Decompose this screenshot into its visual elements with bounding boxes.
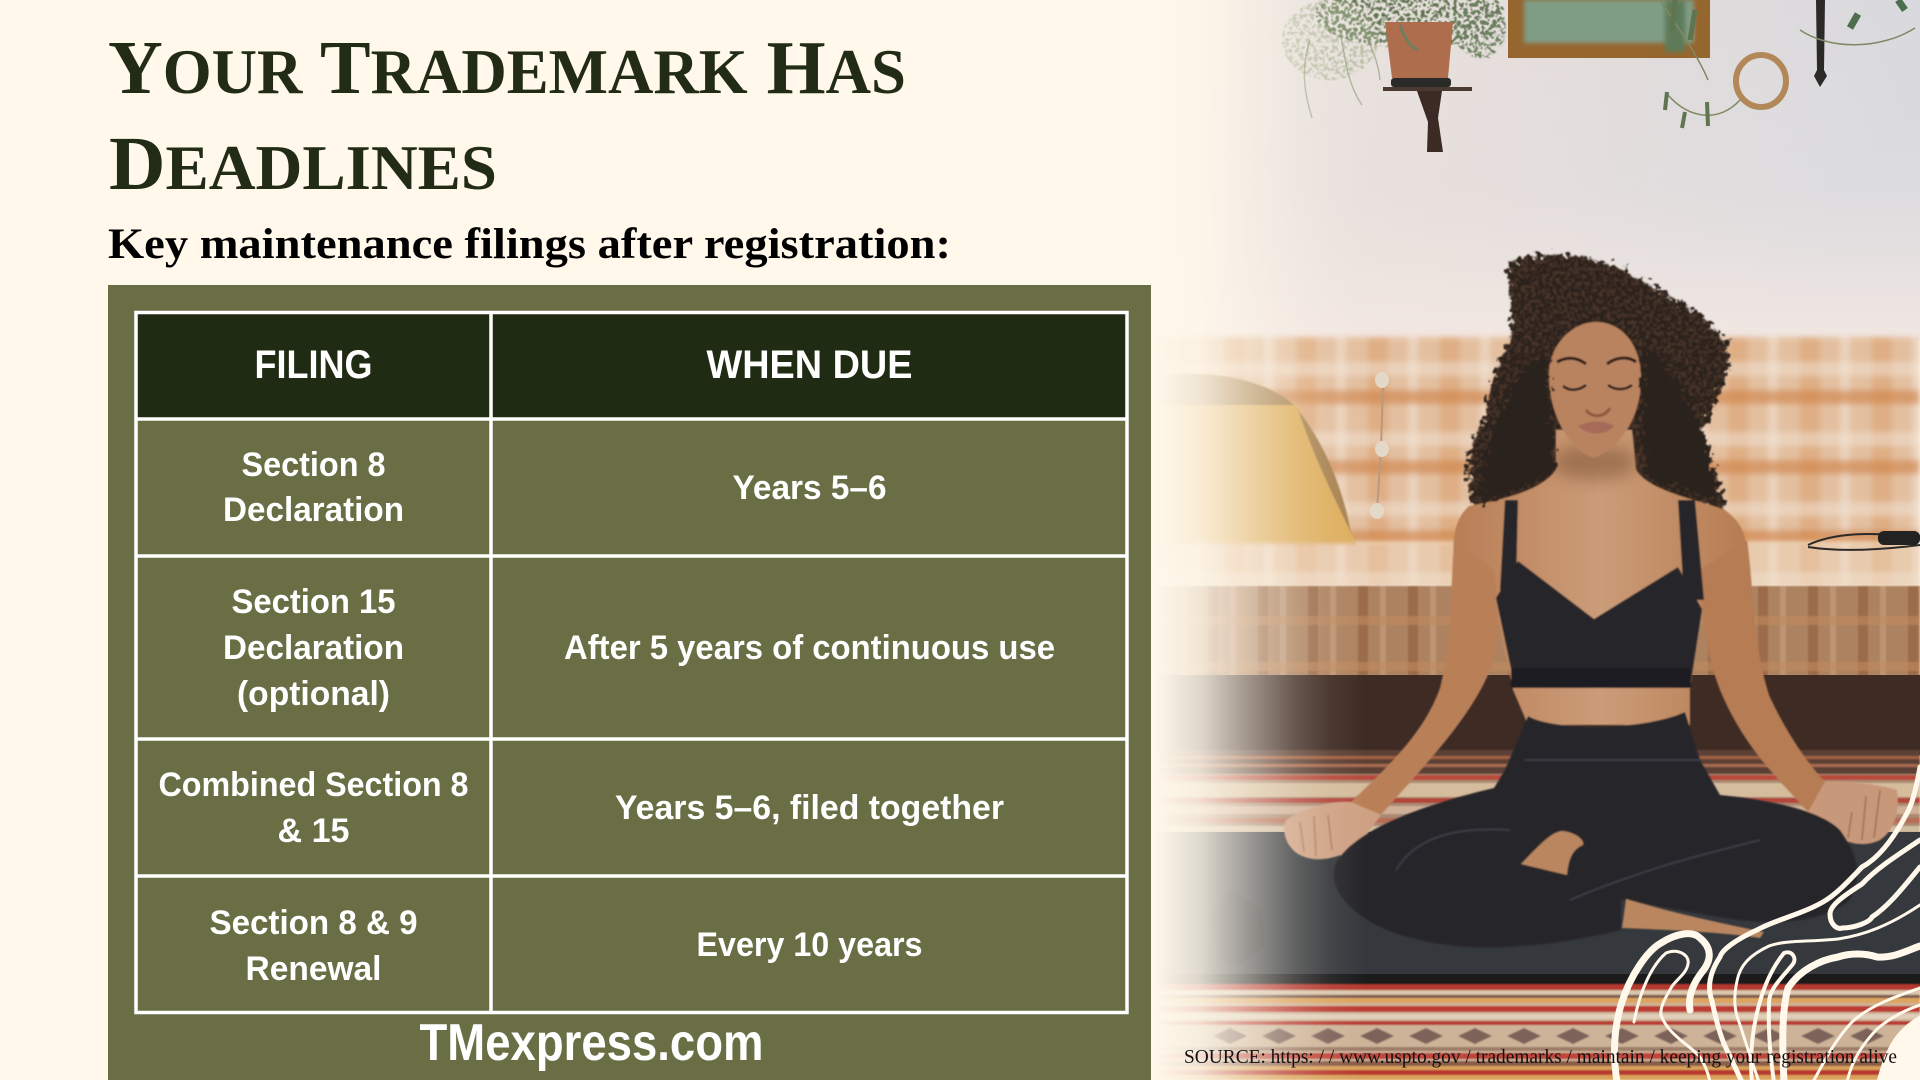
photo: wall <box>1150 0 1920 340</box>
title: Deadlines <box>109 110 497 209</box>
panel: filings table background <box>108 285 1151 1080</box>
woman: right hand <box>1808 782 1898 844</box>
photo: wooden ring <box>1736 55 1786 107</box>
website footer: TMexpress.com <box>420 1014 764 1072</box>
title: Your Trademark Has <box>108 14 906 113</box>
row: section 8: Section 8 <box>242 446 386 484</box>
photo: left fade into page colour <box>1130 0 1365 1080</box>
photo: woman meditating on a mat in a living room <box>1130 0 1920 1080</box>
woman: leggings <box>1334 712 1857 947</box>
woman: neck shadow <box>1552 444 1636 480</box>
woman: front hair locks <box>1481 345 1717 505</box>
row: section 15: After 5 years of continuous use <box>564 629 1055 667</box>
row: section 8 and 9 renewal: Every 10 years <box>696 926 922 964</box>
row: section 15: (optional) <box>237 675 390 713</box>
photo: cable on sofa <box>1808 531 1920 550</box>
header: filing: FILING <box>254 343 372 387</box>
photo: back cushion <box>1150 374 1352 545</box>
row: section 8 and 9 renewal <box>210 904 922 988</box>
woman: left hand <box>1284 802 1381 859</box>
row: section 8 <box>223 446 886 529</box>
photo: picture frame <box>1508 0 1710 58</box>
source note: SOURCE: https: / / www.uspto.gov / trademarks / maintain / keeping your registration alive <box>1184 1046 1897 1068</box>
table grid lines <box>136 312 1127 1013</box>
table header row background <box>135 311 1128 419</box>
photo: dark space under sofa <box>1150 675 1920 755</box>
woman: hair <box>1468 255 1729 510</box>
woman: face <box>1549 322 1641 458</box>
table: filings and due dates <box>135 311 1128 1013</box>
header: when due: WHEN DUE <box>706 343 912 387</box>
subtitle: Key maintenance filings after registration: <box>108 221 951 268</box>
row: section 15 <box>223 583 1055 713</box>
row: section 8: Years 5–6 <box>732 469 886 507</box>
row: section 8: Declaration <box>223 491 404 529</box>
decorative cream swirls <box>1614 767 1920 1080</box>
photo: terracotta pot and wall shelf <box>1383 22 1472 152</box>
photo: lower patterned rug <box>1150 984 1920 1080</box>
photo: hanging plant foliage <box>1282 0 1506 118</box>
title <box>108 14 906 209</box>
woman: torso and neck <box>1454 430 1747 725</box>
photo: wall hook <box>1814 0 1827 87</box>
photo: upper rug <box>1150 750 1920 834</box>
woman: right arm <box>1700 540 1825 812</box>
photo: trailing vines <box>1660 0 1915 128</box>
row: section 15: Declaration <box>223 629 404 667</box>
photo: sofa front <box>1150 586 1920 676</box>
row: combined section 8 and 15: & 15 <box>278 812 350 850</box>
row: combined section 8 and 15: Years 5–6, filed together <box>615 789 1004 827</box>
photo: yoga mat <box>1150 832 1920 986</box>
woman: feet <box>1521 831 1764 938</box>
row: section 15: Section 15 <box>232 583 396 621</box>
row: combined section 8 and 15: Combined Section 8 <box>158 766 468 804</box>
photo: sofa seat <box>1150 543 1920 587</box>
photo: sofa buttons <box>1370 372 1389 519</box>
woman: sports top <box>1496 500 1704 688</box>
row: section 8 and 9 renewal: Section 8 & 9 <box>210 904 418 942</box>
photo: mustard pillow <box>1150 405 1362 558</box>
row: section 8 and 9 renewal: Renewal <box>246 950 382 988</box>
woman: left arm <box>1351 540 1498 815</box>
photo: woman <box>1284 255 1898 947</box>
row: combined section 8 and 15 <box>158 766 1004 850</box>
photo: sofa back <box>1150 337 1920 543</box>
